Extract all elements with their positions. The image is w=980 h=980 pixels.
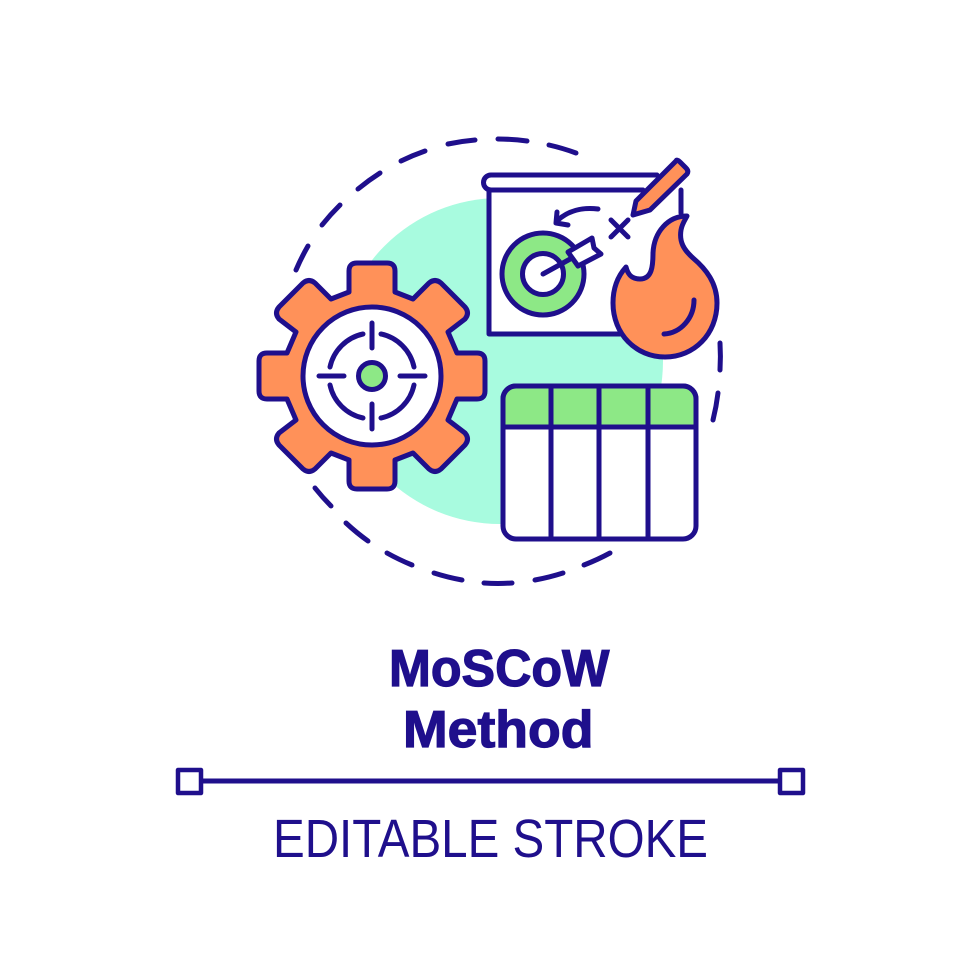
icon: gear with crosshair xyxy=(259,263,485,489)
title: MoSCoW xyxy=(389,640,610,698)
icon: flame xyxy=(613,216,717,357)
title xyxy=(389,640,610,759)
crosshair xyxy=(319,323,425,429)
icon: presentation board xyxy=(484,160,717,357)
dashed orbit circle xyxy=(296,139,720,583)
icon: target with arrow xyxy=(502,233,601,315)
editable stroke line with handles xyxy=(178,770,803,793)
icon: curved strategy arrow xyxy=(556,208,598,225)
icon: pencil xyxy=(633,160,688,215)
icon: x mark xyxy=(611,220,628,237)
caption: EDITABLE STROKE xyxy=(273,809,708,869)
title: Method xyxy=(403,701,594,759)
mint background circle xyxy=(337,198,663,524)
icon: table xyxy=(503,386,696,539)
crosshair centre xyxy=(358,362,386,390)
